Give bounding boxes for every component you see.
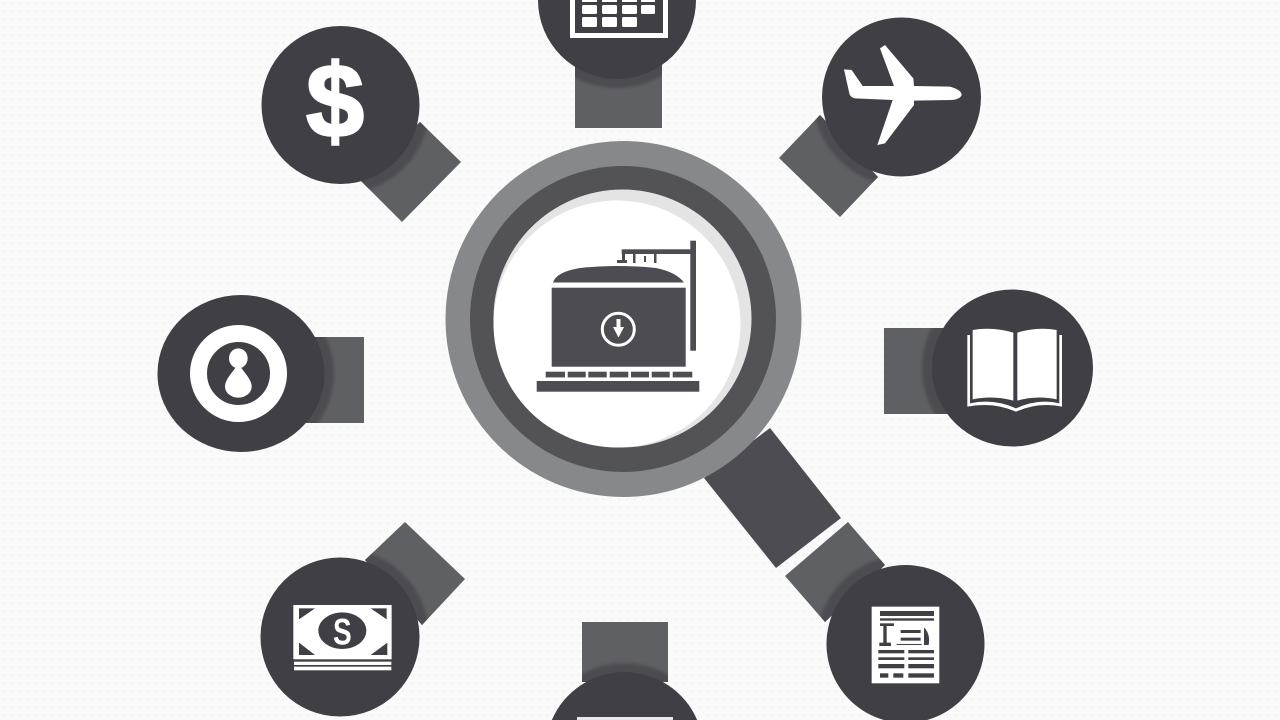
node: book [884,290,1093,446]
lens [494,200,740,448]
node: calendar [538,0,696,128]
icon: bottom icon top edge [577,717,673,720]
magnifier inner dark ring [470,166,776,472]
icon: calendar [572,0,666,36]
lens shade [494,190,752,448]
icon: airplane [844,45,962,145]
magnifier outer ring [446,141,802,497]
node: money bag [158,295,364,452]
icon: storage tank [537,241,699,392]
icon: banknote: S [333,610,352,652]
icon: ring with drop [198,334,278,414]
node: airplane [779,8,991,217]
node: banknote [251,522,465,720]
magnifier handle [704,428,841,568]
icon: newspaper [872,607,939,683]
icon: dollar: $ [306,44,364,160]
icon: banknote [293,605,392,670]
node: newspaper [785,522,994,720]
magnifying glass [446,141,841,568]
icon: open book [967,329,1062,412]
node: dollar sign [252,16,461,222]
node: hidden bottom icon [552,622,698,720]
